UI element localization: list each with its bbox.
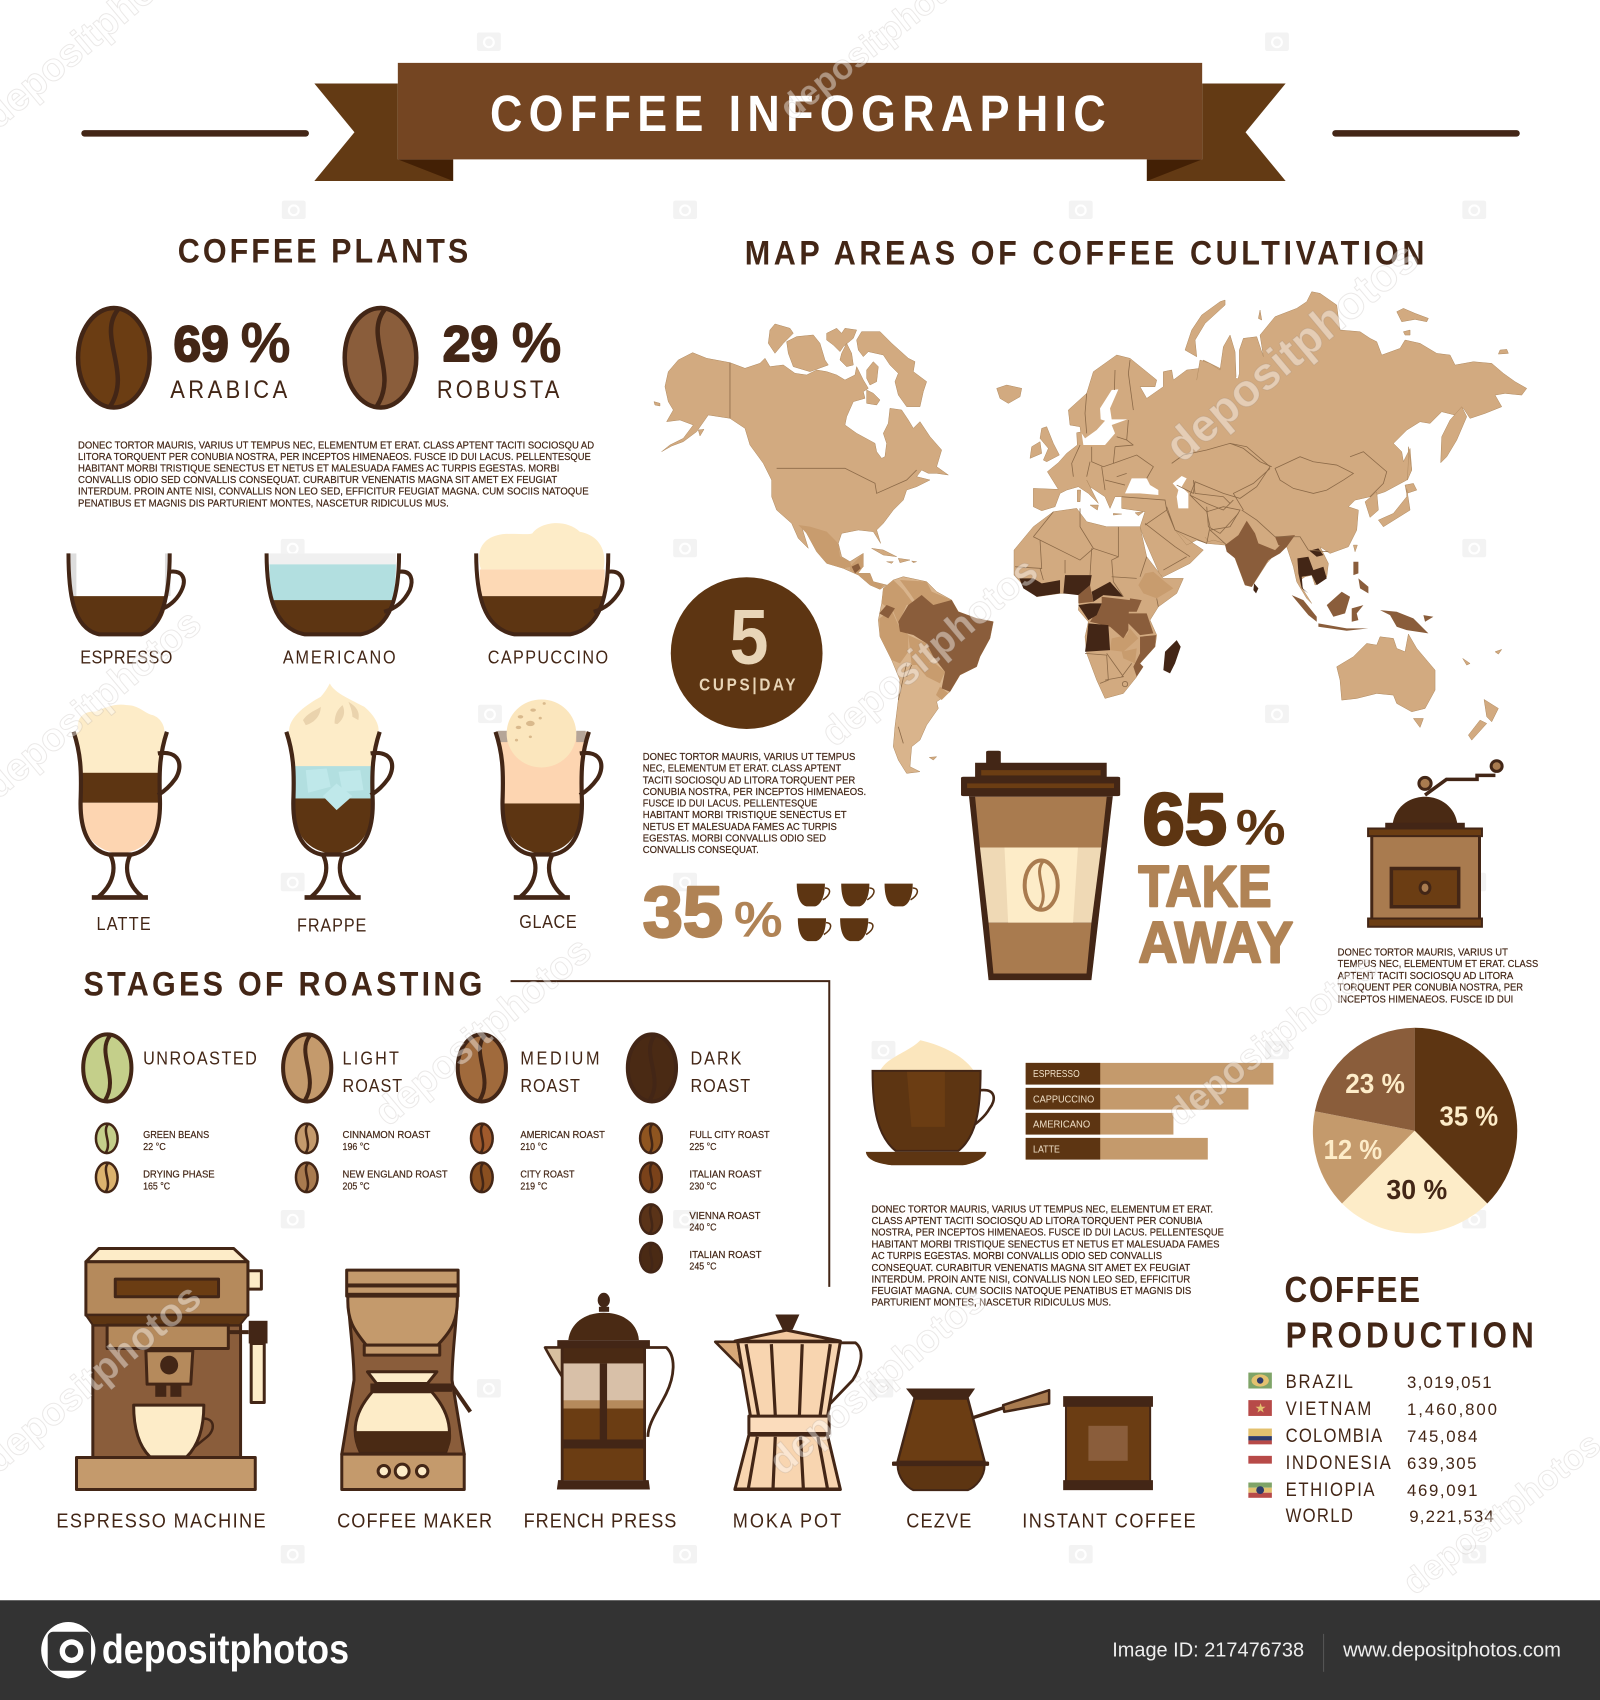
text block: cups: EGESTAS. MORBI CONVALLIS ODIO SED: [643, 834, 826, 845]
text block: coffee plants: LITORA TORQUENT PER CONUBIA NOSTRA, PER INCEPTOS HIMENAEOS. FUSCE ID DUI LACUS. PELLENTESQUE: [78, 452, 591, 463]
roast: unroasted: 22 °C: [143, 1142, 166, 1153]
roast: unroasted: [83, 1034, 257, 1192]
text block: grinder: TORQUENT PER CONUBIA NOSTRA, PER: [1338, 982, 1523, 993]
arabica percent: 69: [173, 316, 229, 372]
text block: cups: DONEC TORTOR MAURIS, VARIUS UT TEMPUS: [643, 752, 855, 763]
bar labels: AMERICANO: [1033, 1120, 1090, 1131]
text block: cups: HABITANT MORBI TRISTIQUE SENECTUS ET: [643, 810, 847, 821]
roast: light: ROAST: [343, 1075, 403, 1096]
panel: roasting stages: [83, 1034, 770, 1273]
text block: chart: CONSEQUAT. CURABITUR VENENATIS MAGNA SIT AMET EX FEUGIAT: [872, 1263, 1191, 1274]
icon: instant coffee: [1063, 1396, 1153, 1490]
roast: light: 196 °C: [343, 1142, 370, 1153]
roast: dark: 230 °C: [689, 1181, 717, 1192]
roast: medium: MEDIUM: [520, 1048, 600, 1069]
stat: 65 percent take away: 65: [1143, 778, 1227, 861]
roast: dark: VIENNA ROAST: [689, 1211, 761, 1222]
text block: grinder: [1338, 948, 1538, 1005]
roast: dark: 225 °C: [689, 1142, 717, 1153]
table: production by country: ETHIOPIA: [1286, 1479, 1375, 1500]
heading: coffee production: COFFEE: [1285, 1271, 1420, 1311]
text block: coffee plants: [78, 440, 594, 509]
label: coffee maker: COFFEE MAKER: [337, 1510, 492, 1533]
label: espresso machine: ESPRESSO MACHINE: [56, 1510, 266, 1533]
pie chart: [1313, 1028, 1517, 1233]
robusta label: ROBUSTA: [437, 376, 560, 403]
image id: Image ID: 217476738: [1112, 1639, 1304, 1662]
table: production by country: 3,019,051: [1407, 1373, 1492, 1392]
world map: [654, 292, 1527, 773]
panel: coffee plants stats: [78, 308, 562, 408]
roast: dark: [628, 1034, 770, 1273]
label: latte: LATTE: [96, 913, 151, 934]
icon: french press: [545, 1293, 673, 1489]
panel: coffee cups: [68, 523, 622, 936]
roast: medium: ROAST: [520, 1075, 580, 1096]
icon: takeaway cup: [961, 751, 1120, 980]
roast: light: CINNAMON ROAST: [343, 1130, 431, 1141]
roast: light: LIGHT: [343, 1048, 399, 1069]
title banner: COFFEE INFOGRAPHIC: [490, 87, 1106, 143]
text block: chart: DONEC TORTOR MAURIS, VARIUS UT TEMPUS NEC, ELEMENTUM ET ERAT.: [872, 1204, 1213, 1215]
robusta bean icon: [345, 308, 416, 408]
table: production by country: 639,305: [1407, 1454, 1476, 1473]
text block: coffee plants: DONEC TORTOR MAURIS, VARIUS UT TEMPUS NEC, ELEMENTUM ET ERAT. CLASS APTENT TACITI SOCIOSQU AD: [78, 440, 594, 451]
table: production by country: VIETNAM: [1286, 1398, 1371, 1419]
roast: unroasted: 165 °C: [143, 1181, 171, 1192]
text block: coffee plants: CONVALLIS ODIO SED CONVALLIS CONSEQUAT. CURABITUR VENENATIS MAGNA SIT AMET EX FEUGIAT: [78, 475, 558, 486]
label: moka pot: MOKA POT: [733, 1510, 841, 1533]
icon: espresso machine: [77, 1248, 268, 1489]
roast: unroasted: GREEN BEANS: [143, 1130, 209, 1141]
icon: espresso cup: [68, 553, 184, 634]
bar labels: [1033, 1069, 1094, 1155]
icon: americano cup: [267, 553, 412, 634]
text block: chart: PARTURIENT MONTES, NASCETUR RIDICULUS MUS.: [872, 1298, 1111, 1309]
arabica percent: [173, 311, 291, 374]
icon: cappuccino cup: [476, 523, 622, 634]
heading: stages of roasting: STAGES OF ROASTING: [83, 963, 482, 1003]
map: europe and africa regions: [1015, 360, 1270, 687]
roast: dark: DARK: [691, 1048, 742, 1069]
flag: ethiopia: [1248, 1483, 1272, 1498]
icon: glace glass: [495, 699, 601, 900]
stat: 65 percent take away: %: [1236, 800, 1286, 856]
stat: 35 percent with cups: [643, 873, 917, 953]
text block: cups: CONUBIA NOSTRA, PER INCEPTOS HIMENAEOS.: [643, 787, 866, 798]
arabica bean icon: [78, 308, 150, 408]
text block: grinder: TEMPUS NEC, ELEMENTUM ET ERAT. CLASS: [1338, 959, 1538, 970]
robusta percent: [443, 311, 562, 374]
heading: coffee production: [1285, 1271, 1534, 1356]
table: production by country: BRAZIL: [1286, 1371, 1353, 1392]
roast: unroasted: DRYING PHASE: [143, 1169, 215, 1180]
flag: vietnam: [1248, 1400, 1272, 1416]
icon: cezve: [892, 1388, 1049, 1490]
heading: coffee plants: COFFEE PLANTS: [178, 231, 468, 270]
footer bar: [0, 1600, 1600, 1700]
roast: light: 205 °C: [343, 1181, 370, 1192]
flag: colombia: [1248, 1429, 1272, 1444]
roast: medium: 219 °C: [520, 1181, 548, 1192]
map: eurasia and africa land: [997, 292, 1527, 740]
logo wordmark: depositphotos: [102, 1626, 349, 1672]
panel: 5 cups per day: 5: [730, 593, 769, 681]
stat: 65 percent take away: AWAY: [1138, 911, 1293, 976]
text block: cups: TACITI SOCIOSQU AD LITORA TORQUENT PER: [643, 775, 856, 786]
text block: chart: CLASS APTENT TACITI SOCIOSQU AD LITORA TORQUENT PER CONUBIA: [872, 1216, 1202, 1227]
roast: medium: [458, 1034, 605, 1192]
bar labels: LATTE: [1033, 1144, 1060, 1155]
pie chart: 23 %: [1345, 1067, 1405, 1099]
panel: cup and bar chart: [866, 1040, 1273, 1165]
bar labels: ESPRESSO: [1033, 1069, 1080, 1080]
icon: coffee cup on saucer: [866, 1040, 994, 1165]
label: espresso: ESPRESSO: [80, 647, 172, 668]
roast: medium: 210 °C: [520, 1142, 548, 1153]
pie chart: 12 %: [1324, 1133, 1382, 1165]
text block: grinder: DONEC TORTOR MAURIS, VARIUS UT: [1338, 948, 1508, 959]
stat: 65 percent take away: TAKE: [1138, 854, 1272, 919]
pie chart: 35 %: [1440, 1099, 1498, 1131]
text: depositphotos: [1155, 231, 1428, 472]
table: production by country: WORLD: [1286, 1505, 1353, 1526]
robusta percent: 29: [443, 316, 498, 372]
roast: dark: 245 °C: [689, 1262, 717, 1273]
label: americano: AMERICANO: [283, 647, 396, 668]
heading: map: MAP AREAS OF COFFEE CULTIVATION: [745, 233, 1424, 272]
roast: medium: CITY ROAST: [520, 1169, 575, 1180]
stat: 35 percent with cups: 35: [643, 873, 723, 953]
roast: dark: FULL CITY ROAST: [689, 1130, 770, 1141]
label: instant coffee: INSTANT COFFEE: [1022, 1510, 1196, 1533]
label: cezve: CEZVE: [906, 1510, 971, 1533]
flag: indonesia: [1248, 1456, 1272, 1464]
flag: vietnam: ★: [1255, 1401, 1266, 1416]
table: production by country: 469,091: [1407, 1481, 1478, 1500]
arabica percent: %: [241, 311, 291, 374]
roast: medium: AMERICAN ROAST: [520, 1130, 605, 1141]
label: cappuccino: CAPPUCCINO: [488, 647, 608, 668]
text block: grinder: APTENT TACITI SOCIOSQU AD LITORA: [1338, 971, 1513, 982]
roast: dark: ITALIAN ROAST: [689, 1169, 762, 1180]
logo icon: [41, 1622, 95, 1678]
label: french press: FRENCH PRESS: [524, 1510, 676, 1533]
panel: 5 cups per day: CUPS|DAY: [699, 676, 796, 695]
text block: coffee plants: HABITANT MORBI TRISTIQUE SENECTUS ET NETUS ET MALESUADA FAMES AC TURPIS EGESTAS. MORBI: [78, 464, 559, 475]
text block: chart: HABITANT MORBI TRISTIQUE SENECTUS ET NETUS ET MALESUADA FAMES: [872, 1239, 1220, 1250]
table: production by country: 1,460,800: [1407, 1400, 1497, 1419]
label: glace: GLACE: [519, 911, 577, 932]
text block: cups: CONVALLIS CONSEQUAT.: [643, 845, 759, 856]
text block: coffee plants: INTERDUM. PROIN ANTE NISI, CONVALLIS NON LEO SED, EFFICITUR FEUGIAT MAGNA. CUM SOCIIS NATOQUE: [78, 487, 589, 498]
stat: 65 percent take away: [1138, 778, 1293, 976]
panel: brewing equipment: [56, 1248, 1196, 1533]
text block: cups: FUSCE ID DUI LACUS. PELLENTESQUE: [643, 799, 817, 810]
flag: brazil: [1248, 1373, 1272, 1389]
roast: light: [283, 1034, 448, 1192]
icon: latte glass: [73, 705, 179, 900]
text block: cups: [643, 752, 866, 856]
label: frappe: FRAPPE: [297, 914, 366, 936]
text block: chart: FEUGIAT MAGNA. CUM SOCIIS NATOQUE PENATIBUS ET MAGNIS DIS: [872, 1286, 1191, 1297]
roast: dark: ITALIAN ROAST: [689, 1250, 762, 1261]
text block: chart: [872, 1204, 1224, 1309]
stat: 35 percent with cups: %: [734, 892, 783, 948]
icon: coffee maker: [342, 1270, 470, 1489]
text: depositphotos: [1159, 945, 1384, 1134]
text: depositphotos: [761, 1278, 994, 1484]
pie chart: 30 %: [1386, 1173, 1447, 1205]
text block: cups: NEC, ELEMENTUM ET ERAT. CLASS APTENT: [643, 764, 842, 775]
bar labels: CAPPUCCINO: [1033, 1095, 1094, 1106]
text block: chart: INTERDUM. PROIN ANTE NISI, CONVALLIS NON LEO SED, EFFICITUR: [872, 1274, 1191, 1285]
bar chart: [1026, 1063, 1273, 1160]
roast: dark: ROAST: [691, 1075, 751, 1096]
text block: coffee plants: PENATIBUS ET MAGNIS DIS PARTURIENT MONTES, NASCETUR RIDICULUS MUS.: [78, 498, 449, 509]
icon: moka pot: [715, 1314, 861, 1490]
table: production by country: INDONESIA: [1286, 1452, 1391, 1473]
title banner: [81, 63, 1520, 181]
heading: coffee production: PRODUCTION: [1286, 1317, 1534, 1356]
arabica label: ARABICA: [170, 376, 288, 403]
text: depositphotos: [366, 929, 600, 1134]
text block: chart: AC TURPIS EGESTAS. MORBI CONVALLIS ODIO SED CONVALLIS: [872, 1251, 1162, 1262]
roast: light: NEW ENGLAND ROAST: [343, 1169, 448, 1180]
robusta percent: %: [512, 311, 562, 374]
icon: frappe glass: [286, 683, 392, 900]
table: production by country: [1248, 1371, 1497, 1526]
site url: www.depositphotos.com: [1342, 1639, 1561, 1662]
roast: unroasted: UNROASTED: [143, 1048, 257, 1069]
text block: chart: NOSTRA, PER INCEPTOS HIMENAEOS. FUSCE ID DUI LACUS. PELLENTESQUE: [872, 1228, 1224, 1239]
panel: 5 cups per day: [671, 577, 823, 729]
map: americas: [654, 324, 993, 773]
table: production by country: 9,221,534: [1409, 1507, 1494, 1526]
text block: cups: NETUS ET MALESUADA FAMES AC TURPIS: [643, 822, 837, 833]
table: production by country: 745,084: [1407, 1427, 1478, 1446]
table: production by country: COLOMBIA: [1286, 1425, 1382, 1446]
roast: dark: 240 °C: [689, 1223, 717, 1234]
icon: coffee grinder: [1368, 761, 1502, 927]
text block: grinder: INCEPTOS HIMENAEOS. FUSCE ID DUI: [1338, 994, 1513, 1005]
map: asia regions: [1193, 443, 1433, 633]
text: depositphotos: [813, 549, 1046, 755]
